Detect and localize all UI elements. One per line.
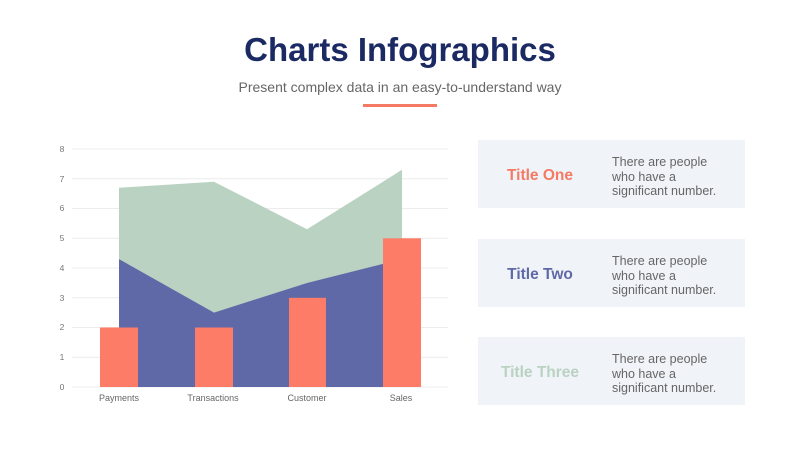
panel: title two: who have a xyxy=(612,268,676,282)
y axis labels: 6 xyxy=(60,203,65,213)
panel: title two: There are people xyxy=(612,254,707,268)
panel: title one: There are people xyxy=(612,155,707,169)
panel: title one: Title One xyxy=(507,167,573,184)
x axis labels: Customer xyxy=(287,393,327,403)
y axis labels: 7 xyxy=(60,174,65,184)
panel: title two xyxy=(478,239,745,307)
panel: title three: significant number. xyxy=(612,381,716,395)
green area series xyxy=(119,170,402,387)
x axis labels: Sales xyxy=(390,393,413,403)
accent underline xyxy=(363,104,437,107)
panel: title two: Title Two xyxy=(507,266,573,283)
bars xyxy=(100,238,421,387)
y axis labels: 0 xyxy=(60,382,65,392)
y axis labels: 1 xyxy=(60,352,65,362)
x axis labels: Transactions xyxy=(187,393,239,403)
chart xyxy=(60,144,448,403)
y axis labels: 3 xyxy=(60,293,65,303)
panel: title three: There are people xyxy=(612,352,707,366)
y axis labels: 4 xyxy=(60,263,65,273)
y axis labels xyxy=(60,144,65,392)
subtitle: Present complex data in an easy-to-understand way xyxy=(239,79,561,95)
y axis labels: 2 xyxy=(60,322,65,332)
y axis labels: 5 xyxy=(60,233,65,243)
x axis labels xyxy=(99,393,413,403)
panel: title two: significant number. xyxy=(612,283,716,297)
panel: title three xyxy=(478,337,745,405)
panel: title three: who have a xyxy=(612,366,676,380)
x axis labels: Payments xyxy=(99,393,140,403)
blue area series xyxy=(119,259,402,387)
panel: title one xyxy=(478,140,745,208)
title: Charts Infographics xyxy=(244,31,556,68)
y axis labels: 8 xyxy=(60,144,65,154)
panel: title one: significant number. xyxy=(612,184,716,198)
panel: title three: Title Three xyxy=(501,364,579,381)
panel: title one: who have a xyxy=(612,170,676,184)
